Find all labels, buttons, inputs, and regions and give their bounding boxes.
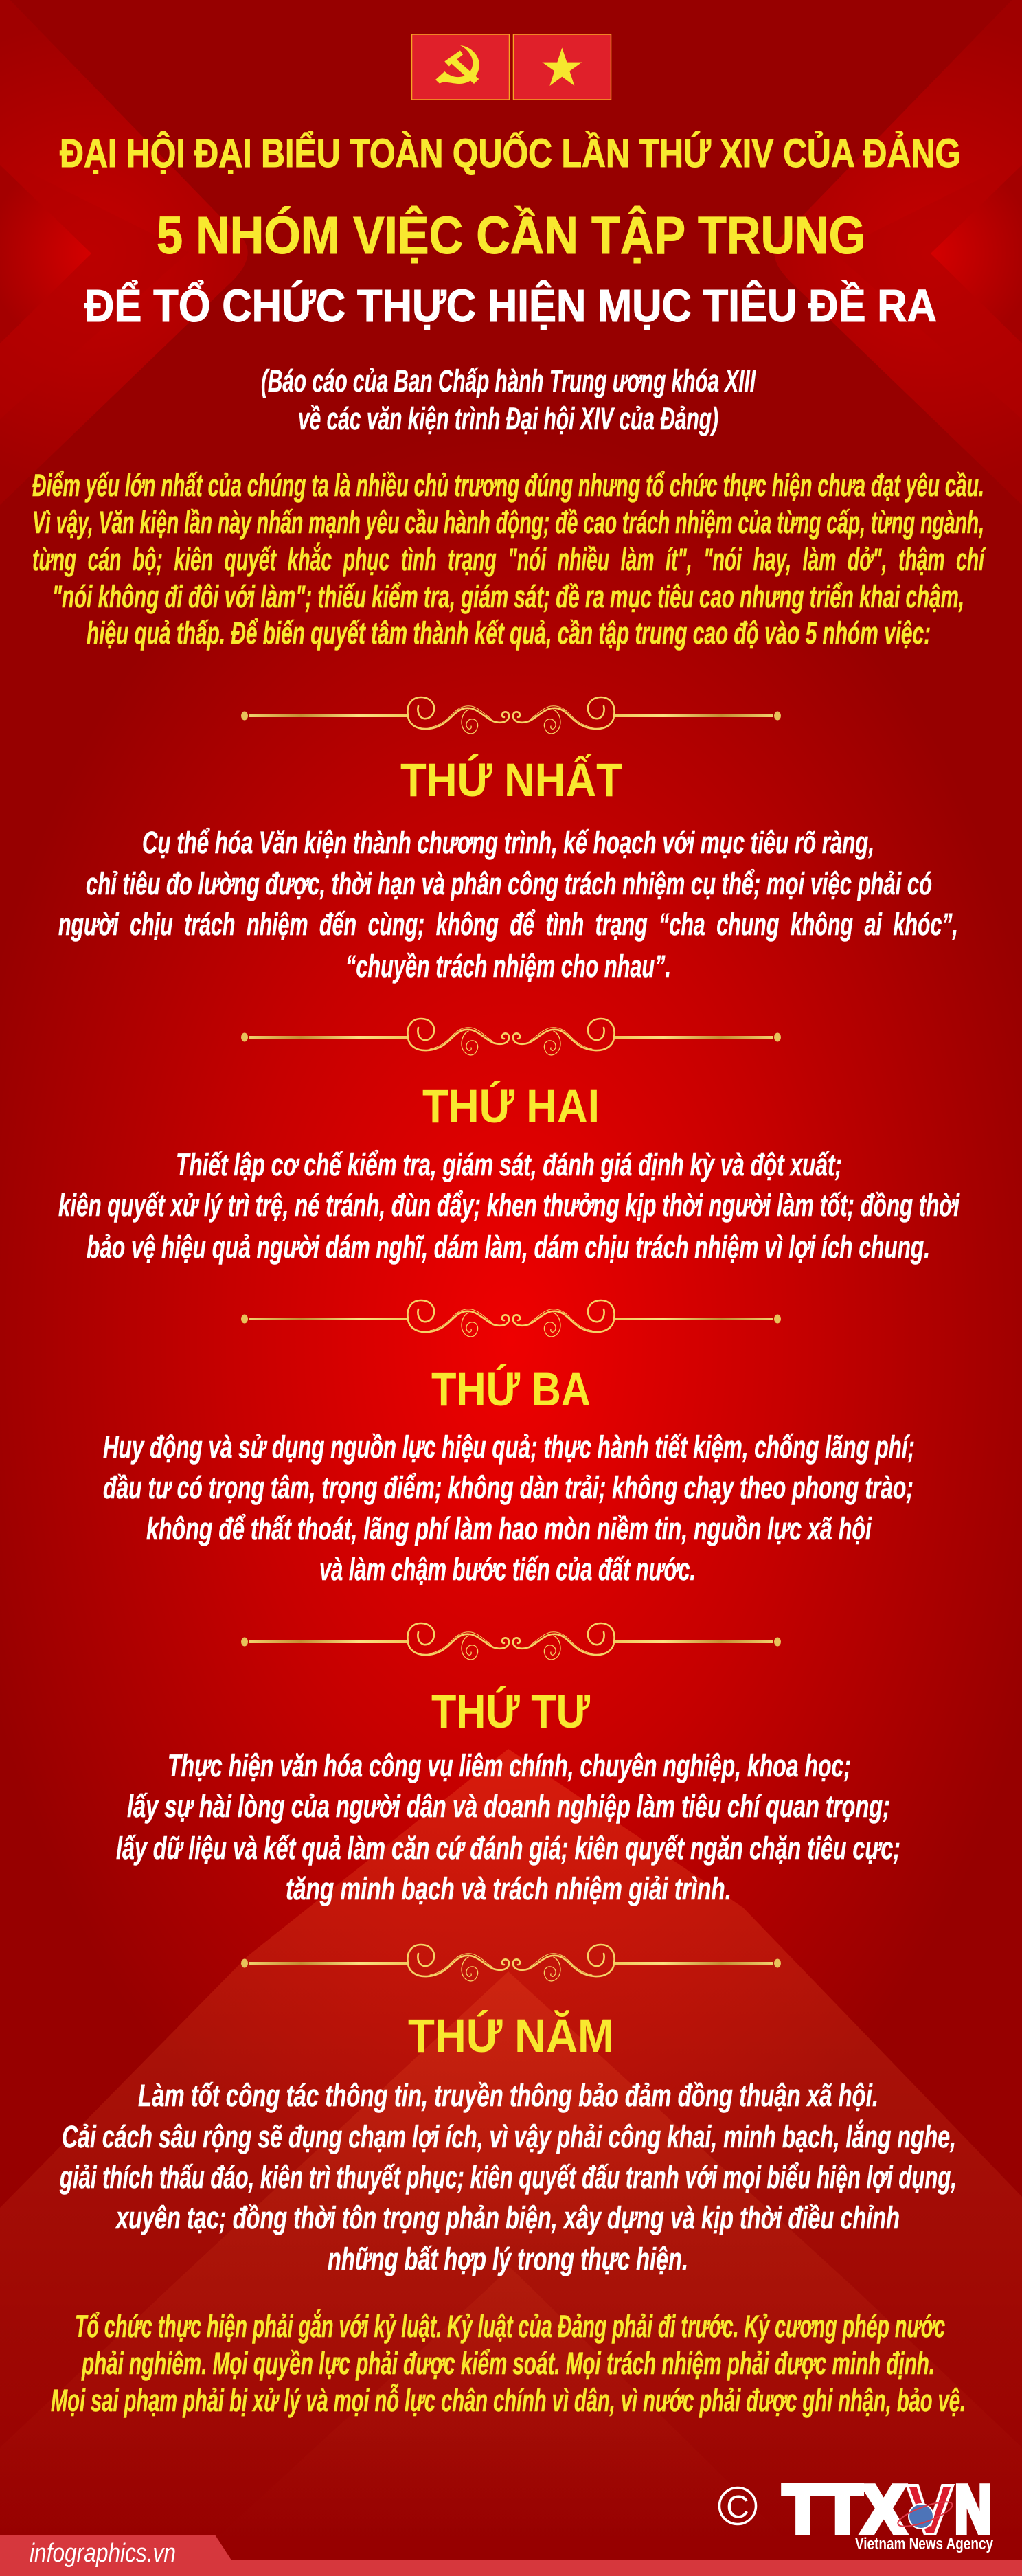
- section: thứ tư: [116, 1685, 900, 1906]
- text block: thứ tư body: [116, 1748, 900, 1906]
- section: thứ ba: [103, 1363, 915, 1587]
- logo: TTXVN: N: [955, 2472, 992, 2547]
- icon: copyright mark: C: [726, 2489, 749, 2524]
- divider ornament 1: [241, 697, 781, 734]
- heading: thứ nhất: THỨ NHẤT: [400, 754, 622, 806]
- title: secondary headline: ĐỂ TỔ CHỨC THỰC HIỆN MỤC TIÊU ĐỀ RA: [84, 280, 937, 332]
- title: main headline: 5 NHÓM VIỆC CẦN TẬP TRUNG: [157, 205, 865, 265]
- heading: thứ ba: THỨ BA: [431, 1363, 591, 1416]
- divider ornament 5: [241, 1945, 781, 1981]
- icon: national flag: [514, 34, 611, 100]
- section: thứ nhất: [58, 754, 958, 984]
- footer site label: infographics.vn: [30, 2539, 176, 2568]
- text block: introduction: [32, 468, 986, 651]
- text block: closing statement: [51, 2309, 966, 2418]
- divider ornament 2: [241, 1019, 781, 1055]
- section: thứ hai: [58, 1080, 960, 1265]
- icon: copyright mark: [720, 2488, 756, 2524]
- text block: thứ nhất body: “chuyền trách nhiệm cho nhau”.: [345, 949, 671, 984]
- logo: TTXVN: V: [907, 2470, 953, 2549]
- text block: thứ nhất body: [58, 825, 958, 984]
- subtitle: source note: [261, 363, 756, 436]
- logo: TTXVN: [783, 2470, 994, 2553]
- subtitle: source note: (Báo cáo của Ban Chấp hành Trung ương khóa XIII: [261, 363, 756, 398]
- logo: TTXVN: TTX: [783, 2472, 905, 2547]
- text block: thứ năm body: [59, 2078, 957, 2276]
- text block: thứ ba body: [103, 1430, 915, 1587]
- section: thứ năm: [59, 2009, 957, 2276]
- icon: party flag: [412, 34, 510, 100]
- text block: thứ ba body: và làm chậm bước tiến của đất nước.: [319, 1552, 696, 1587]
- text block: thứ năm body: những bất hợp lý trong thực hiện.: [328, 2241, 688, 2276]
- divider ornament 3: [241, 1300, 781, 1337]
- footer bar: [0, 2535, 1022, 2576]
- subtitle: source note: về các văn kiện trình Đại hội XIV của Đảng): [298, 401, 718, 436]
- heading: thứ năm: THỨ NĂM: [408, 2009, 614, 2062]
- heading: thứ tư: THỨ TƯ: [431, 1685, 591, 1738]
- text block: thứ tư body: tăng minh bạch và trách nhiệm giải trình.: [286, 1871, 731, 1906]
- divider ornament 4: [241, 1623, 781, 1660]
- heading: thứ hai: THỨ HAI: [422, 1080, 600, 1133]
- text block: thứ hai body: [58, 1147, 960, 1265]
